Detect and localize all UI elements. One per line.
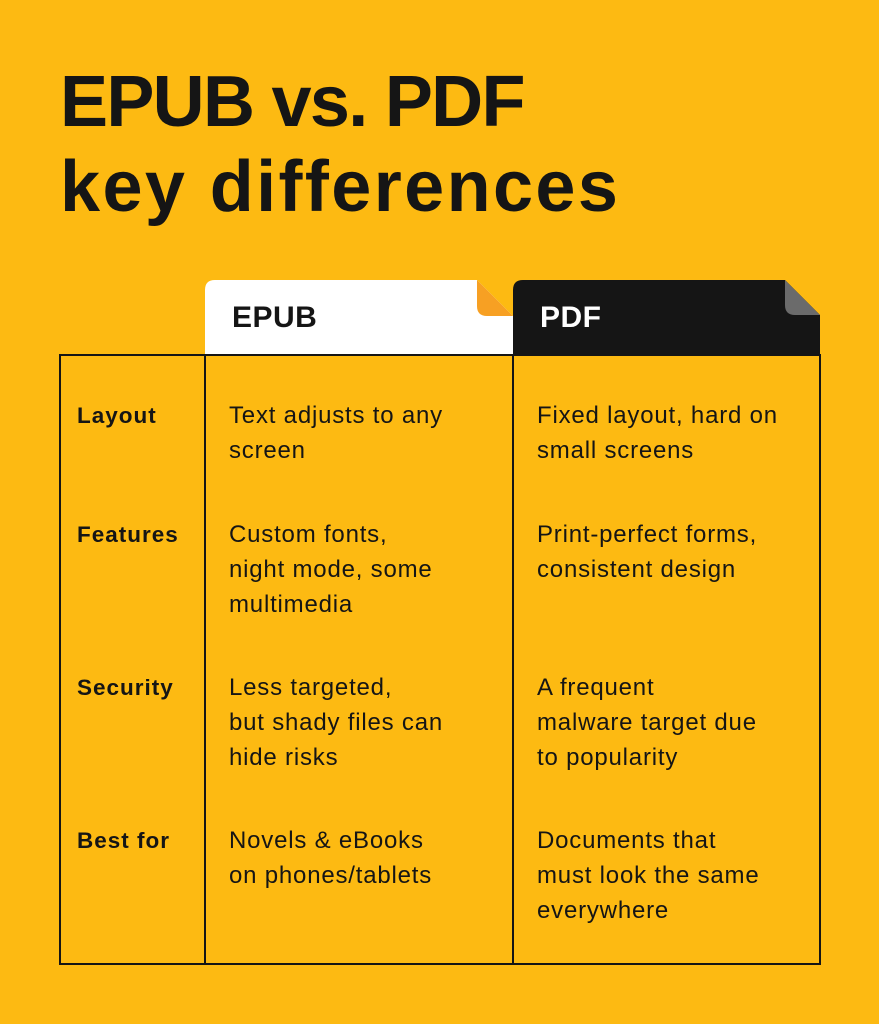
text: hide risks: [229, 744, 338, 771]
text: everywhere: [537, 897, 669, 924]
text: Less targeted,: [229, 674, 392, 701]
text: Security: [77, 675, 174, 700]
text: Best for: [77, 828, 170, 853]
row labels: Layout: [77, 403, 157, 428]
PDF column text: small screens: [537, 437, 694, 464]
title: key differences: [60, 147, 620, 227]
text: Documents that: [537, 827, 716, 854]
title: [60, 62, 620, 227]
tab label EPUB: EPUB: [232, 301, 317, 334]
PDF column text: Fixed layout, hard on: [537, 402, 778, 429]
text: on phones/tablets: [229, 862, 432, 889]
text: A frequent: [537, 674, 654, 701]
text: consistent design: [537, 556, 736, 583]
text: Novels & eBooks: [229, 827, 424, 854]
text: but shady files can: [229, 709, 443, 736]
text: multimedia: [229, 591, 353, 618]
text: Features: [77, 522, 179, 547]
text: night mode, some: [229, 556, 433, 583]
text: malware target due: [537, 709, 757, 736]
EPUB column text: Text adjusts to any: [229, 402, 443, 429]
text: Print-perfect forms,: [537, 521, 757, 548]
PDF column text: [537, 402, 778, 464]
EPUB column text: screen: [229, 437, 306, 464]
text: must look the same: [537, 862, 760, 889]
title: EPUB vs. PDF: [60, 62, 524, 142]
text: to popularity: [537, 744, 678, 771]
table grid: [60, 355, 820, 964]
tab label PDF: PDF: [540, 301, 602, 334]
tab: EPUB: [205, 280, 513, 355]
EPUB column text: [229, 402, 443, 464]
tab: PDF: [513, 280, 820, 355]
text: Custom fonts,: [229, 521, 387, 548]
